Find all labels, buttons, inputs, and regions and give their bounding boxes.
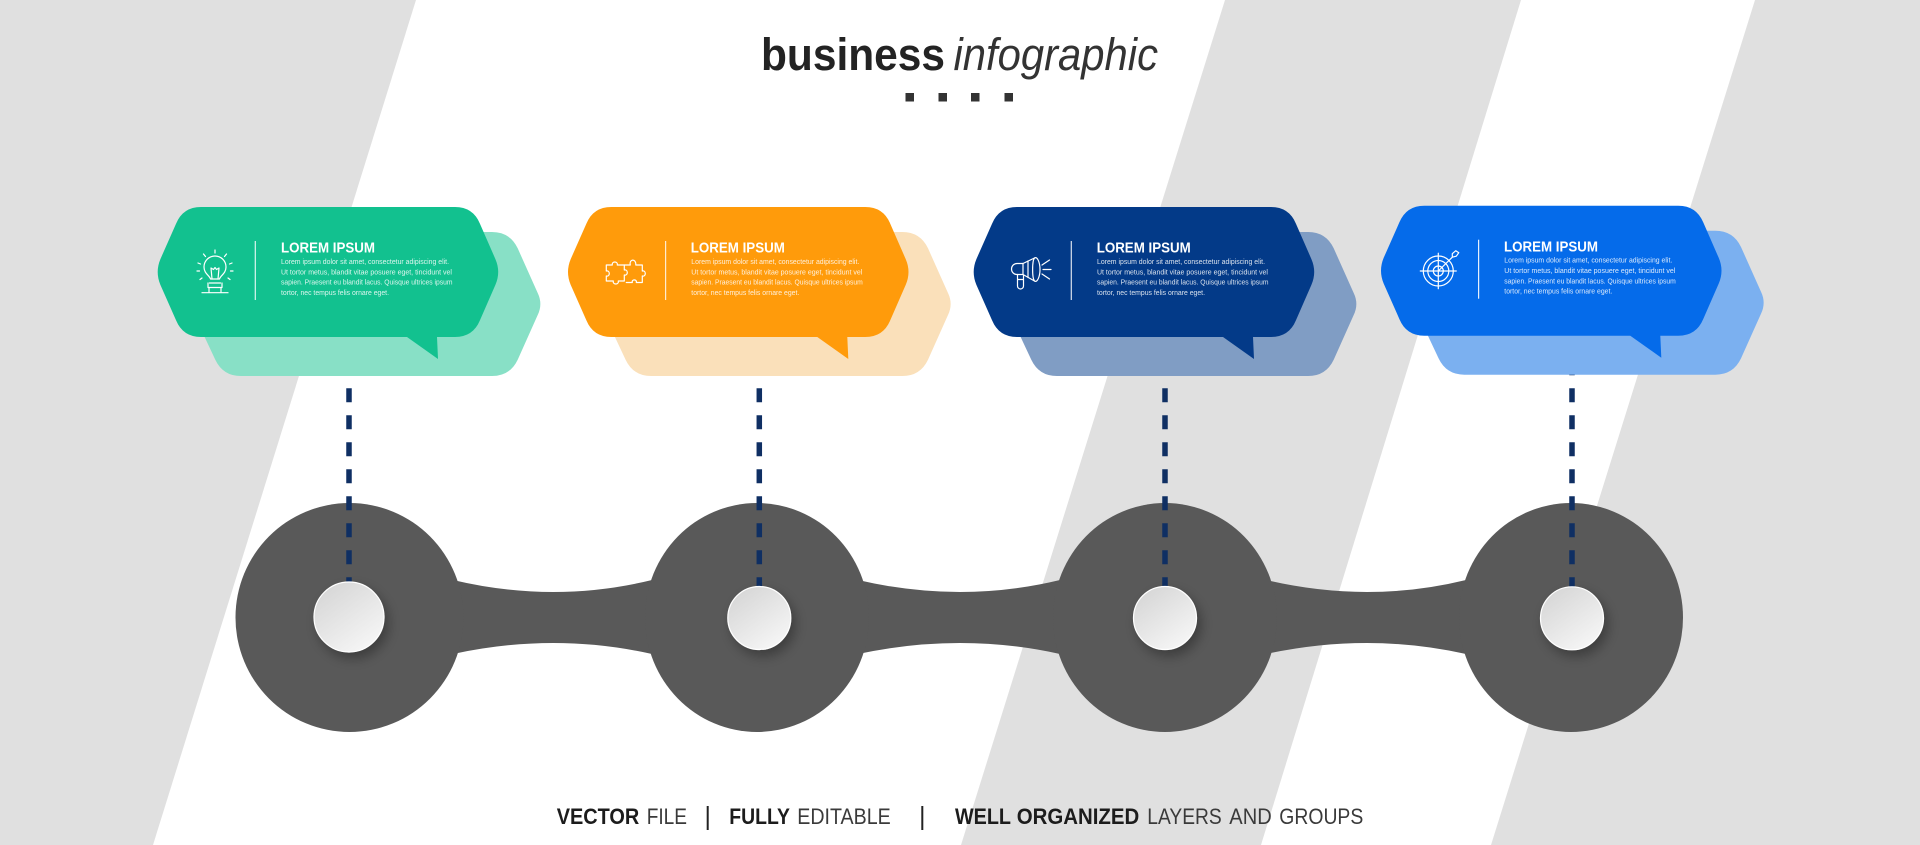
card 2 body text: sapien. Praesent eu blandit lacus. Quisque ultrices ipsum [691,278,863,287]
card 1 body text: Ut tortor metus, blandit vitae posuere eget, tincidunt vel [281,267,452,276]
title dots [906,93,1013,102]
card 3 back shape [1008,232,1356,376]
card 1 heading: LOREM IPSUM [281,240,375,257]
card 1 body text: tortor, nec tempus felis ornare eget. [281,288,389,297]
icon: megaphone [1012,258,1051,289]
card 3 body text: Ut tortor metus, blandit vitae posuere eget, tincidunt vel [1097,267,1268,276]
panel: card 4 blue [1381,206,1764,375]
card 2 back shape [602,232,951,376]
card 3 heading: LOREM IPSUM [1097,240,1191,257]
card 1 body text: Lorem ipsum dolor sit amet, consectetur adipiscing elit. [281,257,449,266]
card 3 body text: tortor, nec tempus felis ornare eget. [1097,288,1205,297]
footer text: VECTOR [557,804,639,829]
dashed line 3 [1162,388,1168,590]
icon: light bulb [197,250,233,293]
card 1 body text [281,257,452,297]
card 2 divider [665,241,666,300]
timeline knob 1 [314,582,384,652]
card 4 body text: tortor, nec tempus felis ornare eget. [1504,286,1612,295]
card 4 back shape [1415,231,1764,375]
card 2 body text: tortor, nec tempus felis ornare eget. [691,288,799,297]
dashed line 4 [1569,361,1575,590]
card 3 body text: Lorem ipsum dolor sit amet, consectetur adipiscing elit. [1097,257,1265,266]
timeline knob 4 [1540,587,1604,650]
card 4 heading: LOREM IPSUM [1504,238,1598,255]
title: business [761,29,945,80]
card 1 back shape [192,232,540,376]
card 3 body text: sapien. Praesent eu blandit lacus. Quisque ultrices ipsum [1097,278,1268,287]
card 4 body text: sapien. Praesent eu blandit lacus. Quisque ultrices ipsum [1504,276,1676,285]
card 4 body text: Ut tortor metus, blandit vitae posuere eget, tincidunt vel [1504,266,1676,275]
card 4 speech bubble [1381,206,1722,358]
card 4 body text [1504,256,1676,296]
footer text: AND [1229,804,1272,829]
card 2 heading: LOREM IPSUM [691,240,785,257]
card 2 body text: Ut tortor metus, blandit vitae posuere eget, tincidunt vel [691,267,863,276]
card 1 body text: sapien. Praesent eu blandit lacus. Quisque ultrices ipsum [281,278,452,287]
card 1 speech bubble [158,207,498,359]
card 2 body text: Lorem ipsum dolor sit amet, consectetur adipiscing elit. [691,257,859,266]
panel: card 1 green [158,207,540,376]
timeline knob 2 [728,586,791,650]
icon: target with dart [1420,251,1459,289]
card 2 speech bubble [568,207,908,359]
card 4 divider [1478,240,1479,299]
footer text: FULLY [729,804,790,829]
footer text: EDITABLE [797,804,891,829]
footer text [557,804,1363,830]
card 1 divider [255,241,256,300]
card 4 body text: Lorem ipsum dolor sit amet, consectetur adipiscing elit. [1504,256,1672,265]
card 3 divider [1071,241,1072,300]
footer text: LAYERS [1147,804,1222,829]
panel: card 3 navy [974,207,1356,376]
card 3 speech bubble [974,207,1314,359]
card 2 body text [691,257,863,297]
timeline knob 3 [1134,586,1196,650]
icon: puzzle pieces [606,260,645,284]
panel: card 2 orange [568,207,951,376]
footer text: FILE [647,804,687,829]
timeline connectors and circles [236,503,1683,732]
dashed line 2 [757,388,762,590]
footer text: WELL [955,804,1011,829]
title [761,29,1158,80]
title: infographic [954,29,1158,80]
dashed line 1 [346,388,352,586]
card 3 body text [1097,257,1268,297]
footer text: GROUPS [1279,804,1363,829]
footer text: ORGANIZED [1017,804,1139,829]
